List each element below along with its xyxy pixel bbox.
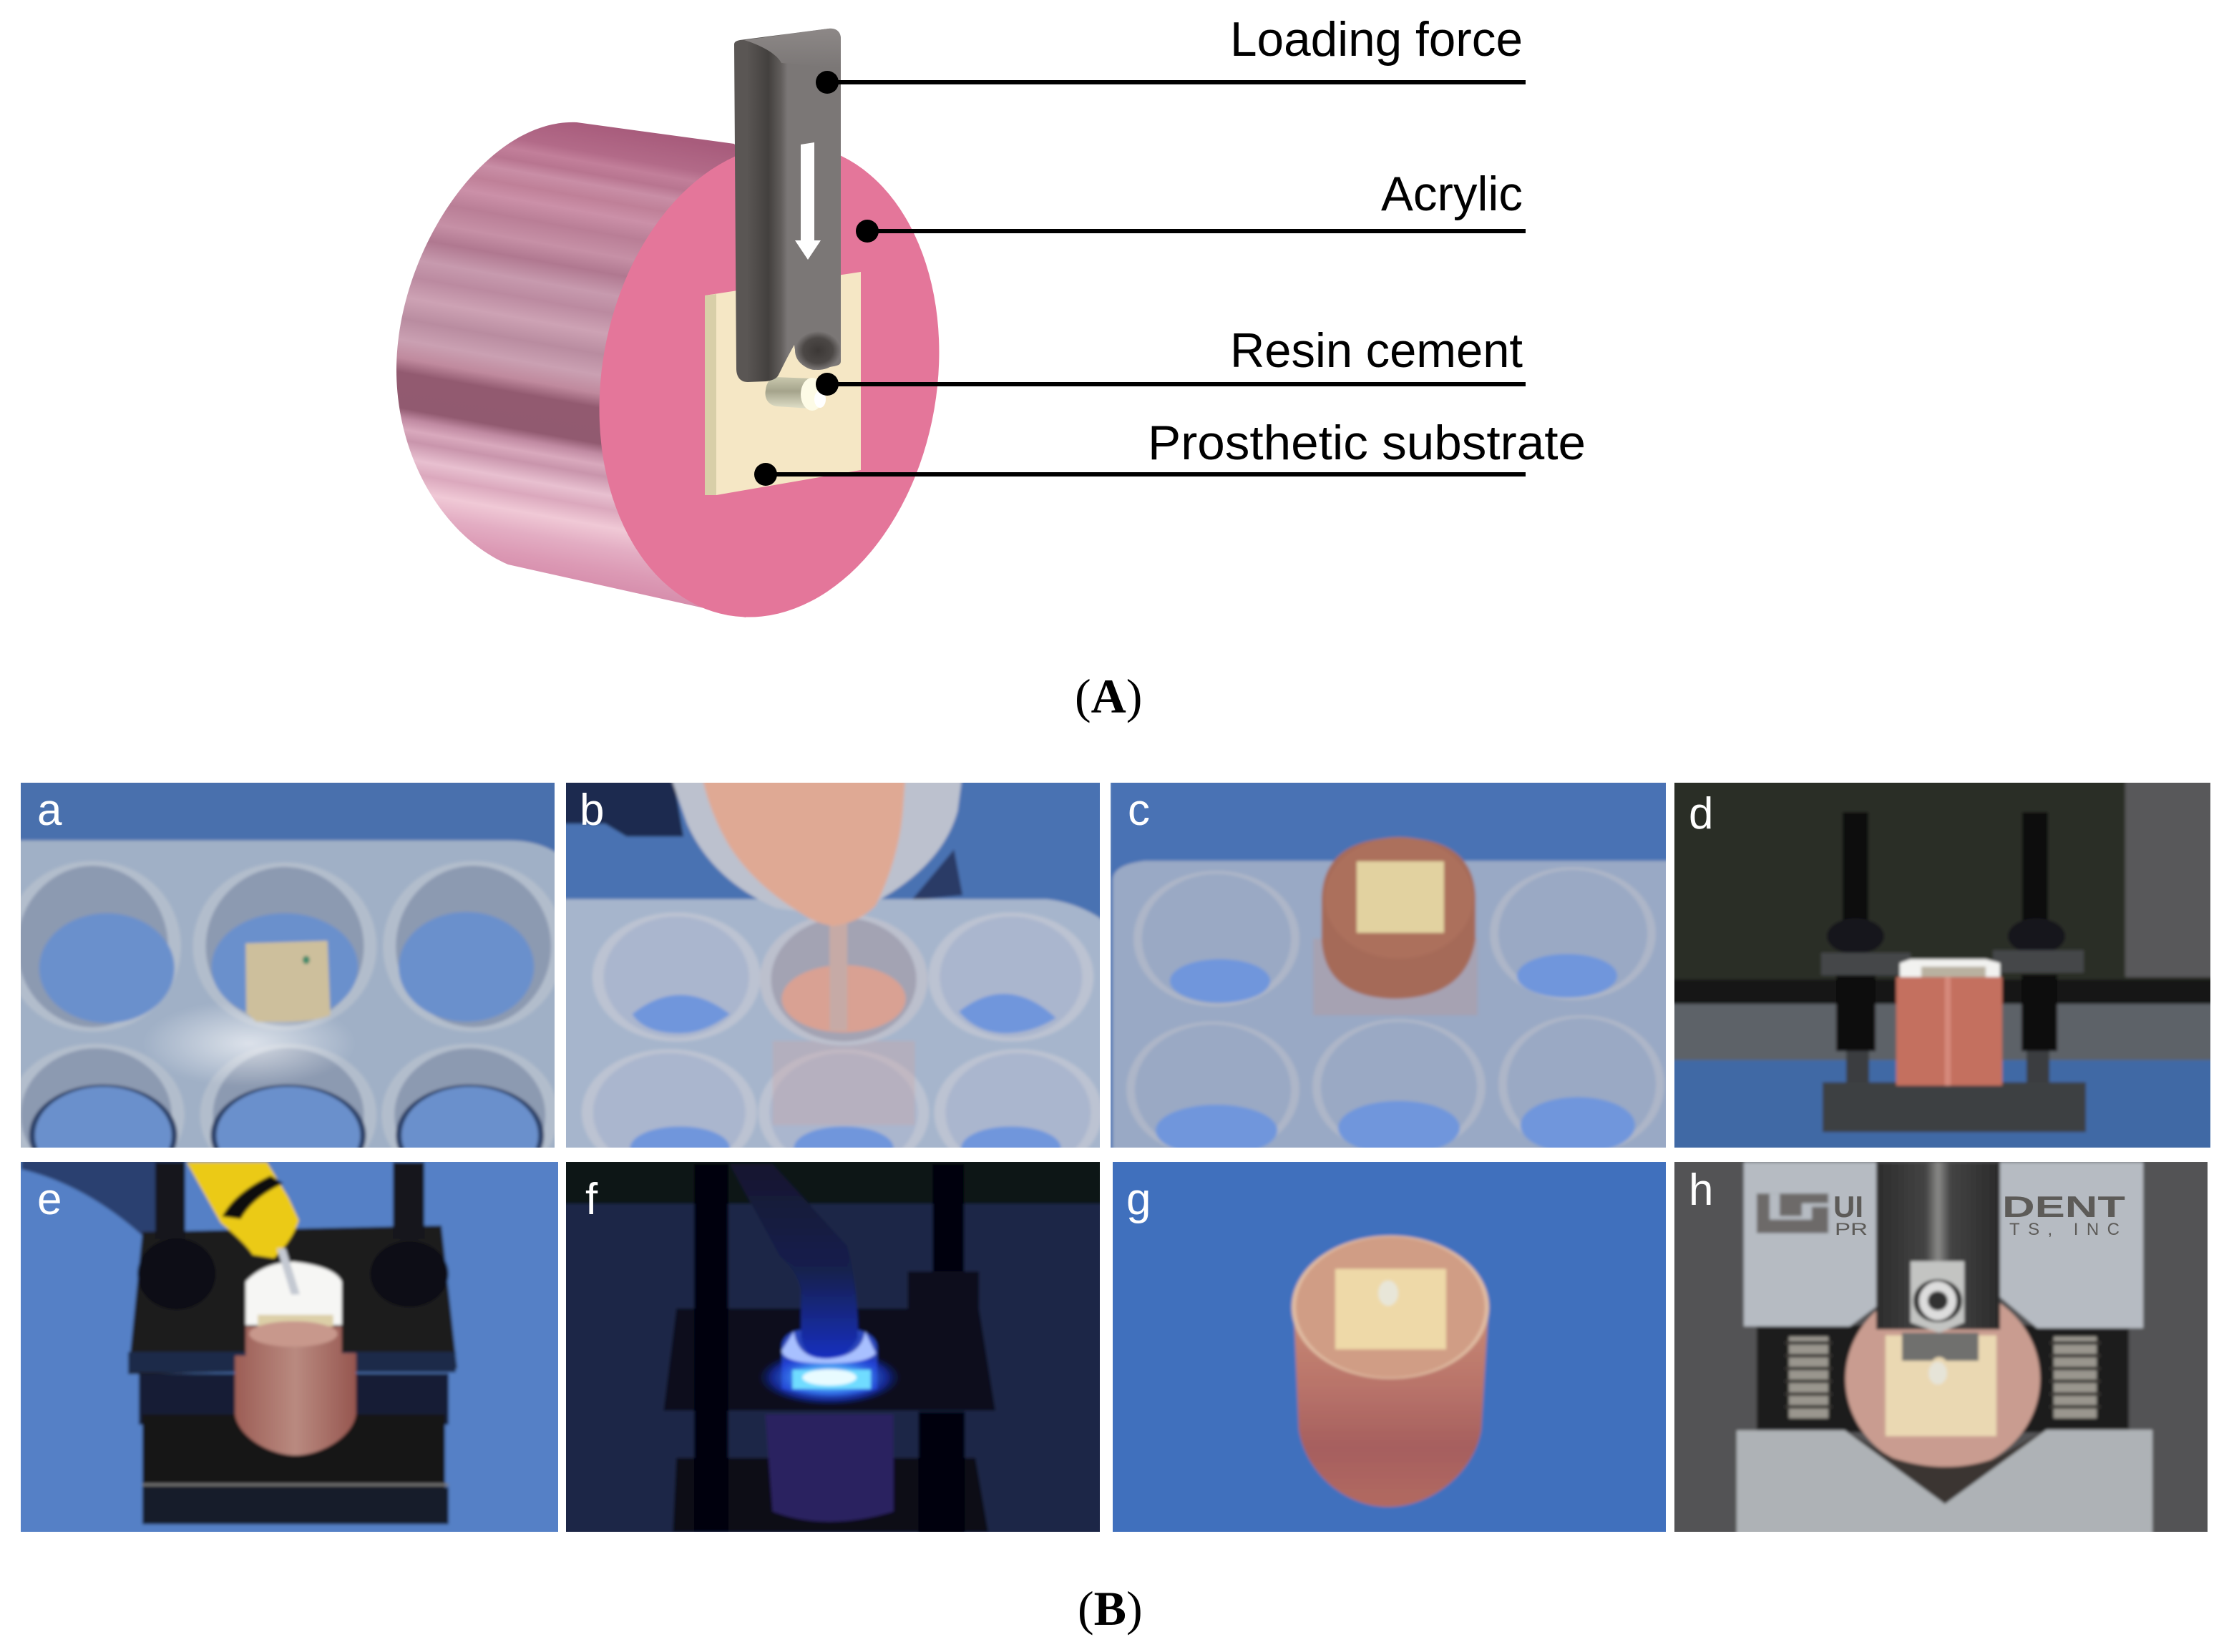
caption: A: (A) [1075, 669, 1142, 723]
photo e: applying cement [0, 1159, 570, 1543]
photo d: fixture with cylinder [1674, 783, 2210, 1148]
photo a label: a [37, 786, 62, 835]
photo e label: e [37, 1175, 62, 1224]
arrow: loading direction [795, 142, 821, 260]
photo c: acrylic cylinder in mould [1109, 773, 1682, 1156]
photo b label: b [580, 786, 604, 835]
acrylic cylinder face [564, 117, 975, 644]
prosthetic substrate block [705, 272, 861, 495]
diagram: shear bond test specimen [396, 29, 1526, 644]
leader: loading force [816, 71, 1526, 94]
leader: resin cement [816, 373, 1526, 396]
photo f: light curing [555, 1159, 1125, 1543]
photo h jig logo text: PR [1835, 1220, 1868, 1239]
caption: B: (B) [1078, 1581, 1143, 1636]
label: loading force: Loading force [1230, 12, 1523, 67]
photo g: bonded specimen [1109, 1159, 1674, 1543]
loading plunger [734, 29, 841, 382]
photo h jig logo text: DENT [2002, 1190, 2125, 1223]
photo h jig logo text: TS, INC [2009, 1220, 2120, 1239]
photo h jig logo text: UI [1833, 1190, 1863, 1223]
photo d label: d [1689, 789, 1713, 839]
leader: prosthetic substrate [754, 463, 1526, 486]
photo g label: g [1126, 1175, 1151, 1224]
leader: acrylic [856, 220, 1526, 243]
acrylic cylinder side [396, 122, 787, 617]
photo c label: c [1128, 786, 1150, 835]
resin cement cylinder [766, 377, 826, 411]
photo f label: f [585, 1175, 598, 1224]
photo h: testing jig [1667, 1159, 2225, 1543]
photo h label: h [1689, 1165, 1713, 1215]
photo a: substrate in mould [21, 783, 555, 1148]
label: acrylic: Acrylic [1381, 167, 1523, 221]
label: resin cement: Resin cement [1230, 323, 1523, 378]
label: prosthetic substrate: Prosthetic substrate [1148, 416, 1586, 470]
photo b: pouring acrylic [566, 783, 1100, 1148]
photo h jig logo text [1833, 1190, 2125, 1239]
